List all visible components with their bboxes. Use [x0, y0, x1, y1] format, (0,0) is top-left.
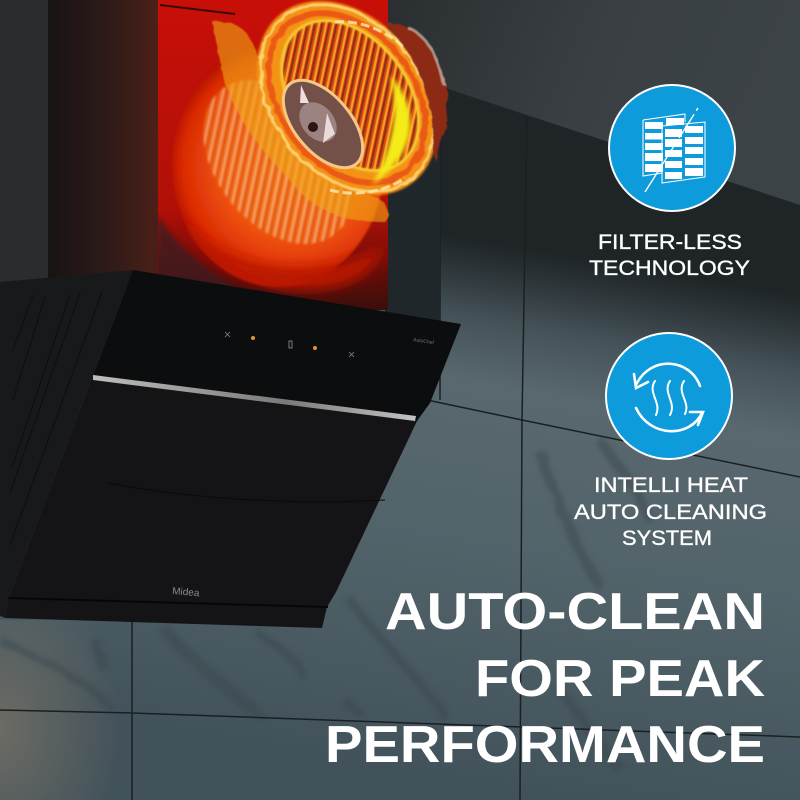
headline: FOR PEAK: [475, 650, 765, 708]
range hood: [0, 270, 461, 628]
headline: [325, 583, 765, 774]
lower crease: [108, 483, 385, 502]
label: AUTO CLEANING: [574, 500, 767, 524]
headline: AUTO-CLEAN: [385, 583, 765, 641]
label: [589, 230, 750, 280]
heated blower fan illustration: [172, 0, 474, 290]
back fan housing: [172, 22, 388, 290]
label: INTELLI HEAT: [594, 473, 748, 497]
feature: filter-less technology: [589, 85, 750, 280]
headline: PERFORMANCE: [325, 716, 765, 774]
control panel lights: AutoChef: [413, 337, 435, 346]
label: FILTER-LESS: [598, 230, 742, 254]
icon: heat cycle: [606, 333, 732, 459]
label: TECHNOLOGY: [589, 256, 750, 280]
steel trim bar: [93, 375, 416, 421]
flame edge: [383, 22, 447, 160]
icon: filter panels: [609, 85, 735, 211]
lower glass panel: [5, 375, 417, 628]
cream rim streaks: [330, 22, 405, 193]
control panel lights: [225, 332, 435, 357]
label: SYSTEM: [622, 526, 712, 550]
side panel: [0, 270, 133, 618]
chimney duct: [0, 0, 440, 330]
brand logo: Midea: [172, 586, 200, 599]
label: [574, 473, 767, 550]
upper glass panel: [93, 270, 461, 421]
feature: intelli heat auto cleaning: [574, 333, 767, 550]
fan hub: [268, 66, 378, 182]
front fan wheel: [220, 0, 474, 230]
bottom lip: [8, 598, 328, 607]
yellow glow crescent: [372, 75, 410, 185]
